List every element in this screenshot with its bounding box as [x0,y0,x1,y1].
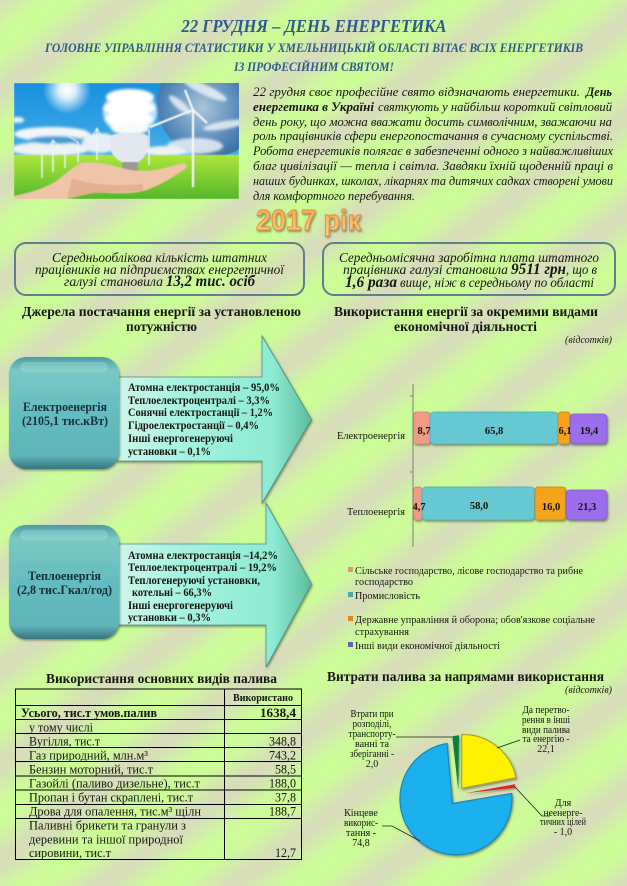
label: final use: 74,8 [352,838,370,849]
table: fuel use [16,689,302,860]
label: non-energy [540,798,587,838]
legend: Інші види економічної діяльності [355,640,500,652]
slice: conversion [462,734,516,788]
label: losses: Втрати при [350,709,394,720]
table: fuel use: 348,8 [269,734,296,748]
subtitle: ГОЛОВНЕ УПРАВЛІННЯ СТАТИСТИКИ У ХМЕЛЬНИЦЬКІЙ ОБЛАСТІ ВІТАЄ ВСІХ ЕНЕРГЕТИКІВ [44,40,583,55]
arrow text: heat sources: установки – 0,3% [128,612,211,624]
table: fuel use: Газ природний, млн.м³ [29,748,148,762]
panel: employees: 13,2 тис. осіб [166,273,256,290]
photo: energy-saving lamp over a hand, wind turbines and Earth [14,83,239,199]
legend: Державне управління й оборона; обов'язкове соціальне [355,614,595,626]
label: final use: тання - [346,828,376,839]
table: fuel use: 12,7 [275,846,296,860]
arrow text: heat sources: Теплогенеруючі установки, [128,575,260,587]
leader lines [382,737,550,841]
box: heat [9,525,119,639]
arrow: electricity [117,336,312,503]
pie chart: fuel spending [344,705,587,855]
box: electricity: Електроенергія [23,400,107,414]
legend: Промисловість [355,590,420,602]
panel: salary: , що в [566,262,597,277]
year heading: 2017 рік [256,205,361,237]
arrow: heat [117,503,312,667]
table: fuel use: Бензин моторний, тис.т [29,762,154,776]
lamp base [110,133,148,162]
label: final use: Кінцеве [344,808,378,819]
arrow text: heat sources: Теплоелектроцентралі – 19,2% [128,562,277,574]
panel: salary: Середньомісячна заробітна плата штатного [339,250,599,265]
table: fuel use: 188,0 [269,776,296,790]
arrow text: electricity sources [128,382,280,458]
heading: fuel spending: Витрати палива за напрямами використання [327,669,604,684]
arrow text: heat sources [128,550,278,624]
slice: non-energy [465,784,515,793]
title: 22 ГРУДНЯ – ДЕНЬ ЕНЕРГЕТИКА [181,16,446,36]
bar chart: energy use by activity: 16,0 [542,502,560,513]
bar: electricity [414,412,607,444]
arrow text: heat sources: Атомна електростанція –14,2% [128,550,278,562]
intro text [252,85,614,203]
slice: final use [400,744,512,855]
box: electricity: (2105,1 тис.кВт) [22,414,108,428]
bar chart: energy use by activity: 8,7 [417,426,431,437]
bar chart: energy use by activity: 21,3 [578,502,596,513]
table: fuel use: Дрова для опалення, тис.м³ щілн [29,804,201,818]
bar chart: energy use by activity: Теплоенергія [347,506,405,518]
label: non-energy: неенерге- [544,808,582,819]
intro text: для комфортного перебування. [253,189,415,203]
panel: salary: працівника галузі становила [343,262,508,277]
heading: energy use: (відсотків) [565,335,613,346]
legend [348,565,595,652]
panel: employees: галузі становила [64,274,163,289]
panel: salary [323,243,615,295]
bar chart: energy use by activity: Електроенергія [337,430,405,442]
intro text: день року, що можна вважати досить символічним, зважаючи на [253,115,612,129]
table: fuel use: Використано [233,693,293,704]
label: conversion: види палива [522,725,571,736]
table: fuel use: 37,8 [275,790,296,804]
label: conversion: Да перетво- [522,705,570,716]
heading: energy use: Використання енергії за окремими видами [334,304,598,319]
label: non-energy: тичних цілей [540,817,587,828]
box: heat: Теплоенергія [28,569,101,583]
table: fuel use: 58,5 [275,762,296,776]
label: losses: розподілі, [352,719,392,730]
label: losses: 2,0 [366,759,378,770]
bar chart: energy use by activity: 65,8 [485,426,503,437]
label: losses: транспорту- [348,729,396,740]
panel: salary: вище, ніж в середньому по області [400,275,594,290]
label: final use [344,808,378,849]
legend: страхування [355,626,409,638]
arrow text: electricity sources: Інші енергогенеруючі [128,433,234,445]
intro text: благ цивілізації — тепла і світла. Завдяки їхній щоденній праці в [253,159,614,173]
label: final use: викорис- [344,818,378,829]
slice: losses [452,735,459,790]
heading: fuel table: Використання основних видів палива [46,671,277,686]
panel: employees: працівників на підприємствах енергетичної [35,262,285,277]
bar chart: energy use by activity: 4,7 [412,502,426,513]
panel: employees [15,243,304,295]
bar chart: energy use by activity: 58,0 [470,501,488,512]
panel: employees: Середньооблікова кількість штатних [52,250,267,265]
heading: energy sources: потужністю [126,319,197,334]
label: conversion [522,705,571,755]
bar chart: energy use by activity [337,384,607,547]
subtitle [44,40,583,74]
table: fuel use: Паливні брикети та гранули з [29,818,186,832]
label: non-energy: Для [555,798,572,809]
intro text: наших будинках, школах, лікарнях та дитячих садках створені умови [253,174,613,188]
bar chart: energy use by activity: 6,1 [558,426,572,437]
heading: energy sources: Джерела постачання енергії за установленою [22,304,301,319]
table: fuel use: Усього, тис.т умов.палив [21,706,157,720]
subtitle: ІЗ ПРОФЕСІЙНИМ СВЯТОМ! [233,59,394,74]
panel: salary: 1,6 раза [345,274,397,291]
heading: energy use: економічної діяльності [394,319,537,334]
intro text: День [585,85,612,99]
table: fuel use: 743,2 [269,748,296,762]
intro text: Робота енергетиків полягає в забезпеченні одного з найважливіших [252,144,613,158]
intro text: 22 грудня своє професійне свято відзначають енергетики. [253,85,580,99]
arrow text: electricity sources: Сонячні електростанції – 1,2% [128,407,273,419]
intro text: енергетика в Україні [253,100,375,114]
table: fuel use: Вугілля, тис.т [29,734,101,748]
legend: господарство [355,576,413,588]
arrow text: heat sources: Інші енергогенеруючі [128,600,234,612]
heading: energy sources [22,304,301,334]
heading: fuel spending [327,669,613,696]
bar chart: energy use by activity: 19,4 [580,426,599,437]
arrow text: electricity sources: Атомна електростанція – 95,0% [128,382,280,394]
table: fuel use: деревини та іншої природної [29,832,184,846]
box: electricity [9,357,119,469]
arrow text: electricity sources: Теплоелектроцентралі – 3,3% [128,395,270,407]
table: fuel use: Газойлі (паливо дизельне), тис.т [29,776,201,790]
arrow text: electricity sources: установки – 0,1% [128,446,211,458]
arrow text: heat sources: котельні – 66,3% [132,587,212,599]
intro text: роль працівників сфери енергопостачання в сучасному суспільстві. [252,129,613,143]
bar: heat [414,487,607,520]
table: fuel use: у тому числі [29,720,93,734]
heading: energy use [334,304,613,346]
box: heat: (2,8 тис.Гкал/год) [17,583,112,597]
label: losses: ванні та [355,739,390,750]
table: fuel use: Пропан і бутан скраплені, тис.т [29,790,194,804]
intro text: святкують у найбільш короткий світловий [378,100,613,114]
label: non-energy: - 1,0 [554,827,572,838]
panel: salary: 9511 грн [511,261,566,278]
label: conversion: 22,1 [537,744,555,755]
table: fuel use: 188,7 [269,804,296,818]
legend: Сільське господарство, лісове господарство та рибне [355,565,583,577]
heading: fuel spending: (відсотків) [565,685,613,696]
label: losses [348,709,396,770]
table: fuel use: 1638,4 [260,706,297,720]
label: conversion: та енергію - [522,734,570,745]
label: losses: зберіганні - [350,749,394,760]
label: conversion: рення в інші [522,715,570,726]
table: fuel use: сировини, тис.т [29,846,112,860]
arrow text: electricity sources: Гідроелектростанції – 0,4% [128,420,259,432]
